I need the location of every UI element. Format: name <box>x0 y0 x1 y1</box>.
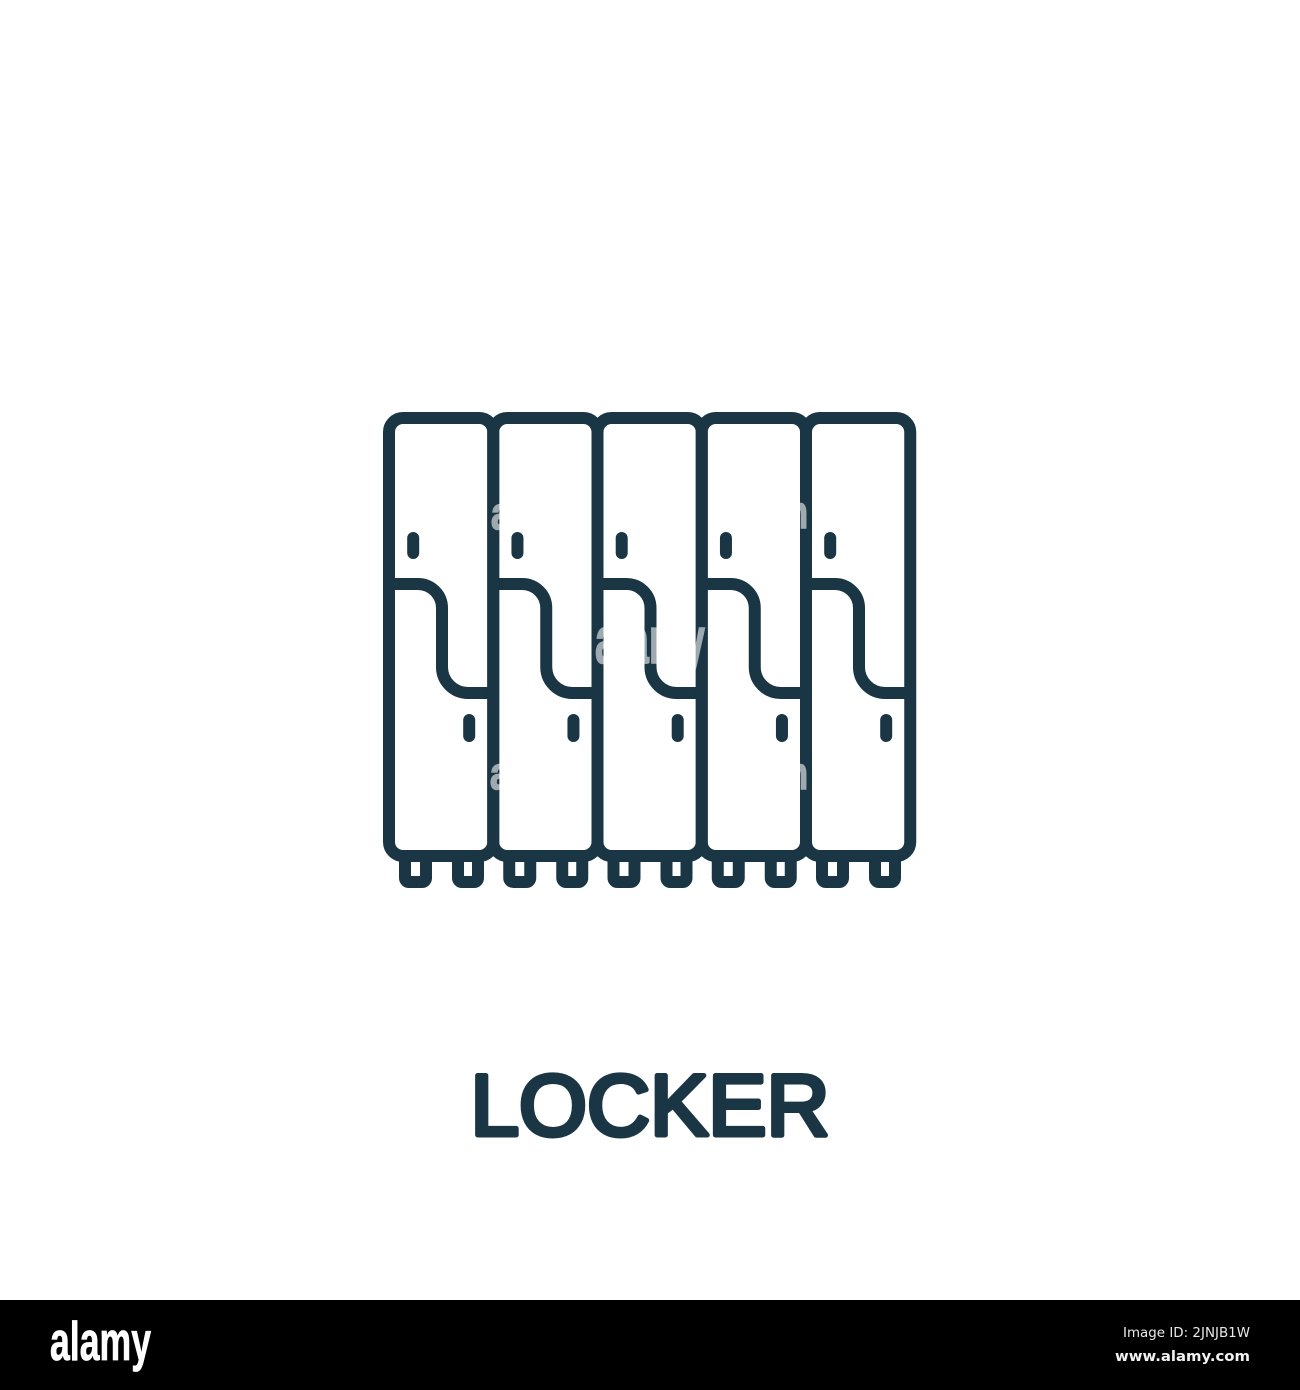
title: LOCKER: LOCKER <box>470 1058 830 1154</box>
watermark overlay: alamy <box>595 603 705 677</box>
icon: row of five lockers <box>389 418 910 882</box>
watermark overlay: a <box>490 748 511 799</box>
locker 1 <box>389 418 493 882</box>
image id: Image ID: 2JNJB1W <box>1123 1326 1250 1341</box>
website url: www.alamy.com <box>1115 1349 1250 1365</box>
watermark overlay: m <box>778 748 808 799</box>
watermark overlay <box>490 487 808 799</box>
locker 3 <box>598 418 702 882</box>
locker 4 <box>702 418 806 882</box>
locker 2 <box>493 418 598 882</box>
locker 5 <box>806 418 910 882</box>
watermark overlay: m <box>778 487 808 538</box>
watermark overlay: a <box>491 488 512 539</box>
alamy logo: alamy <box>50 1310 151 1372</box>
footer bar <box>0 1300 1300 1390</box>
